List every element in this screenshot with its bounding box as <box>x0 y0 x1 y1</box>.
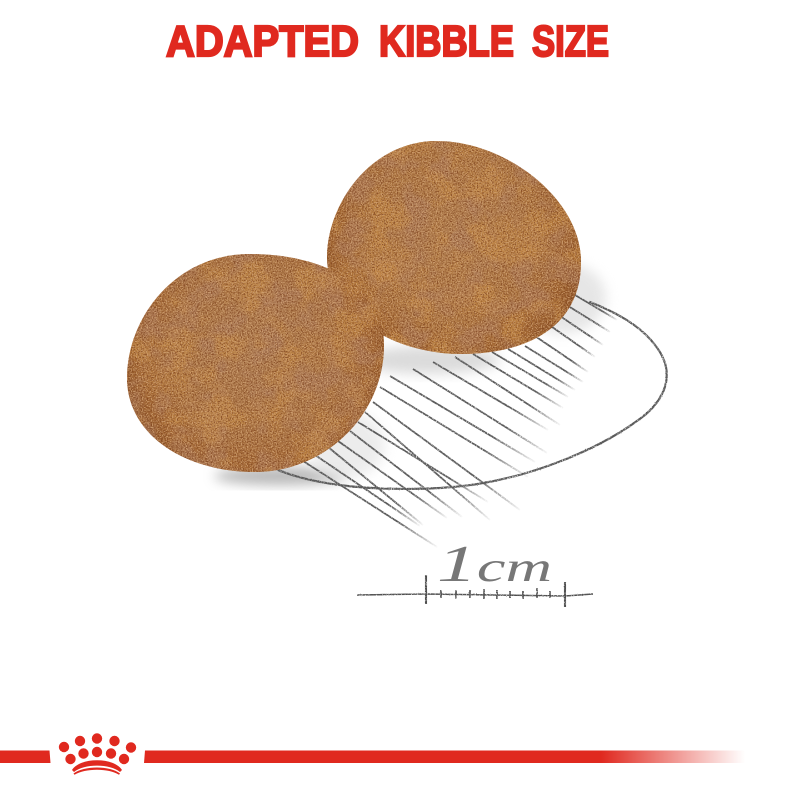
icon: royal crown logo <box>59 733 136 775</box>
scale: 1 cm ruler <box>357 536 593 607</box>
cast shadows <box>214 262 606 485</box>
handwritten label: 1 cm <box>437 536 552 593</box>
footer bar right fading <box>144 750 745 763</box>
title: KIBBLE <box>379 18 514 66</box>
ruler line and ticks <box>357 575 593 607</box>
title: ADAPTED <box>166 18 359 66</box>
pencil ellipse <box>278 302 667 489</box>
title <box>166 18 609 66</box>
title: SIZE <box>532 18 609 66</box>
footer bar left <box>0 750 50 763</box>
back kibble <box>320 135 585 360</box>
front kibble <box>120 250 390 478</box>
pencil hatching <box>303 292 617 547</box>
kibble illustration <box>120 135 667 547</box>
